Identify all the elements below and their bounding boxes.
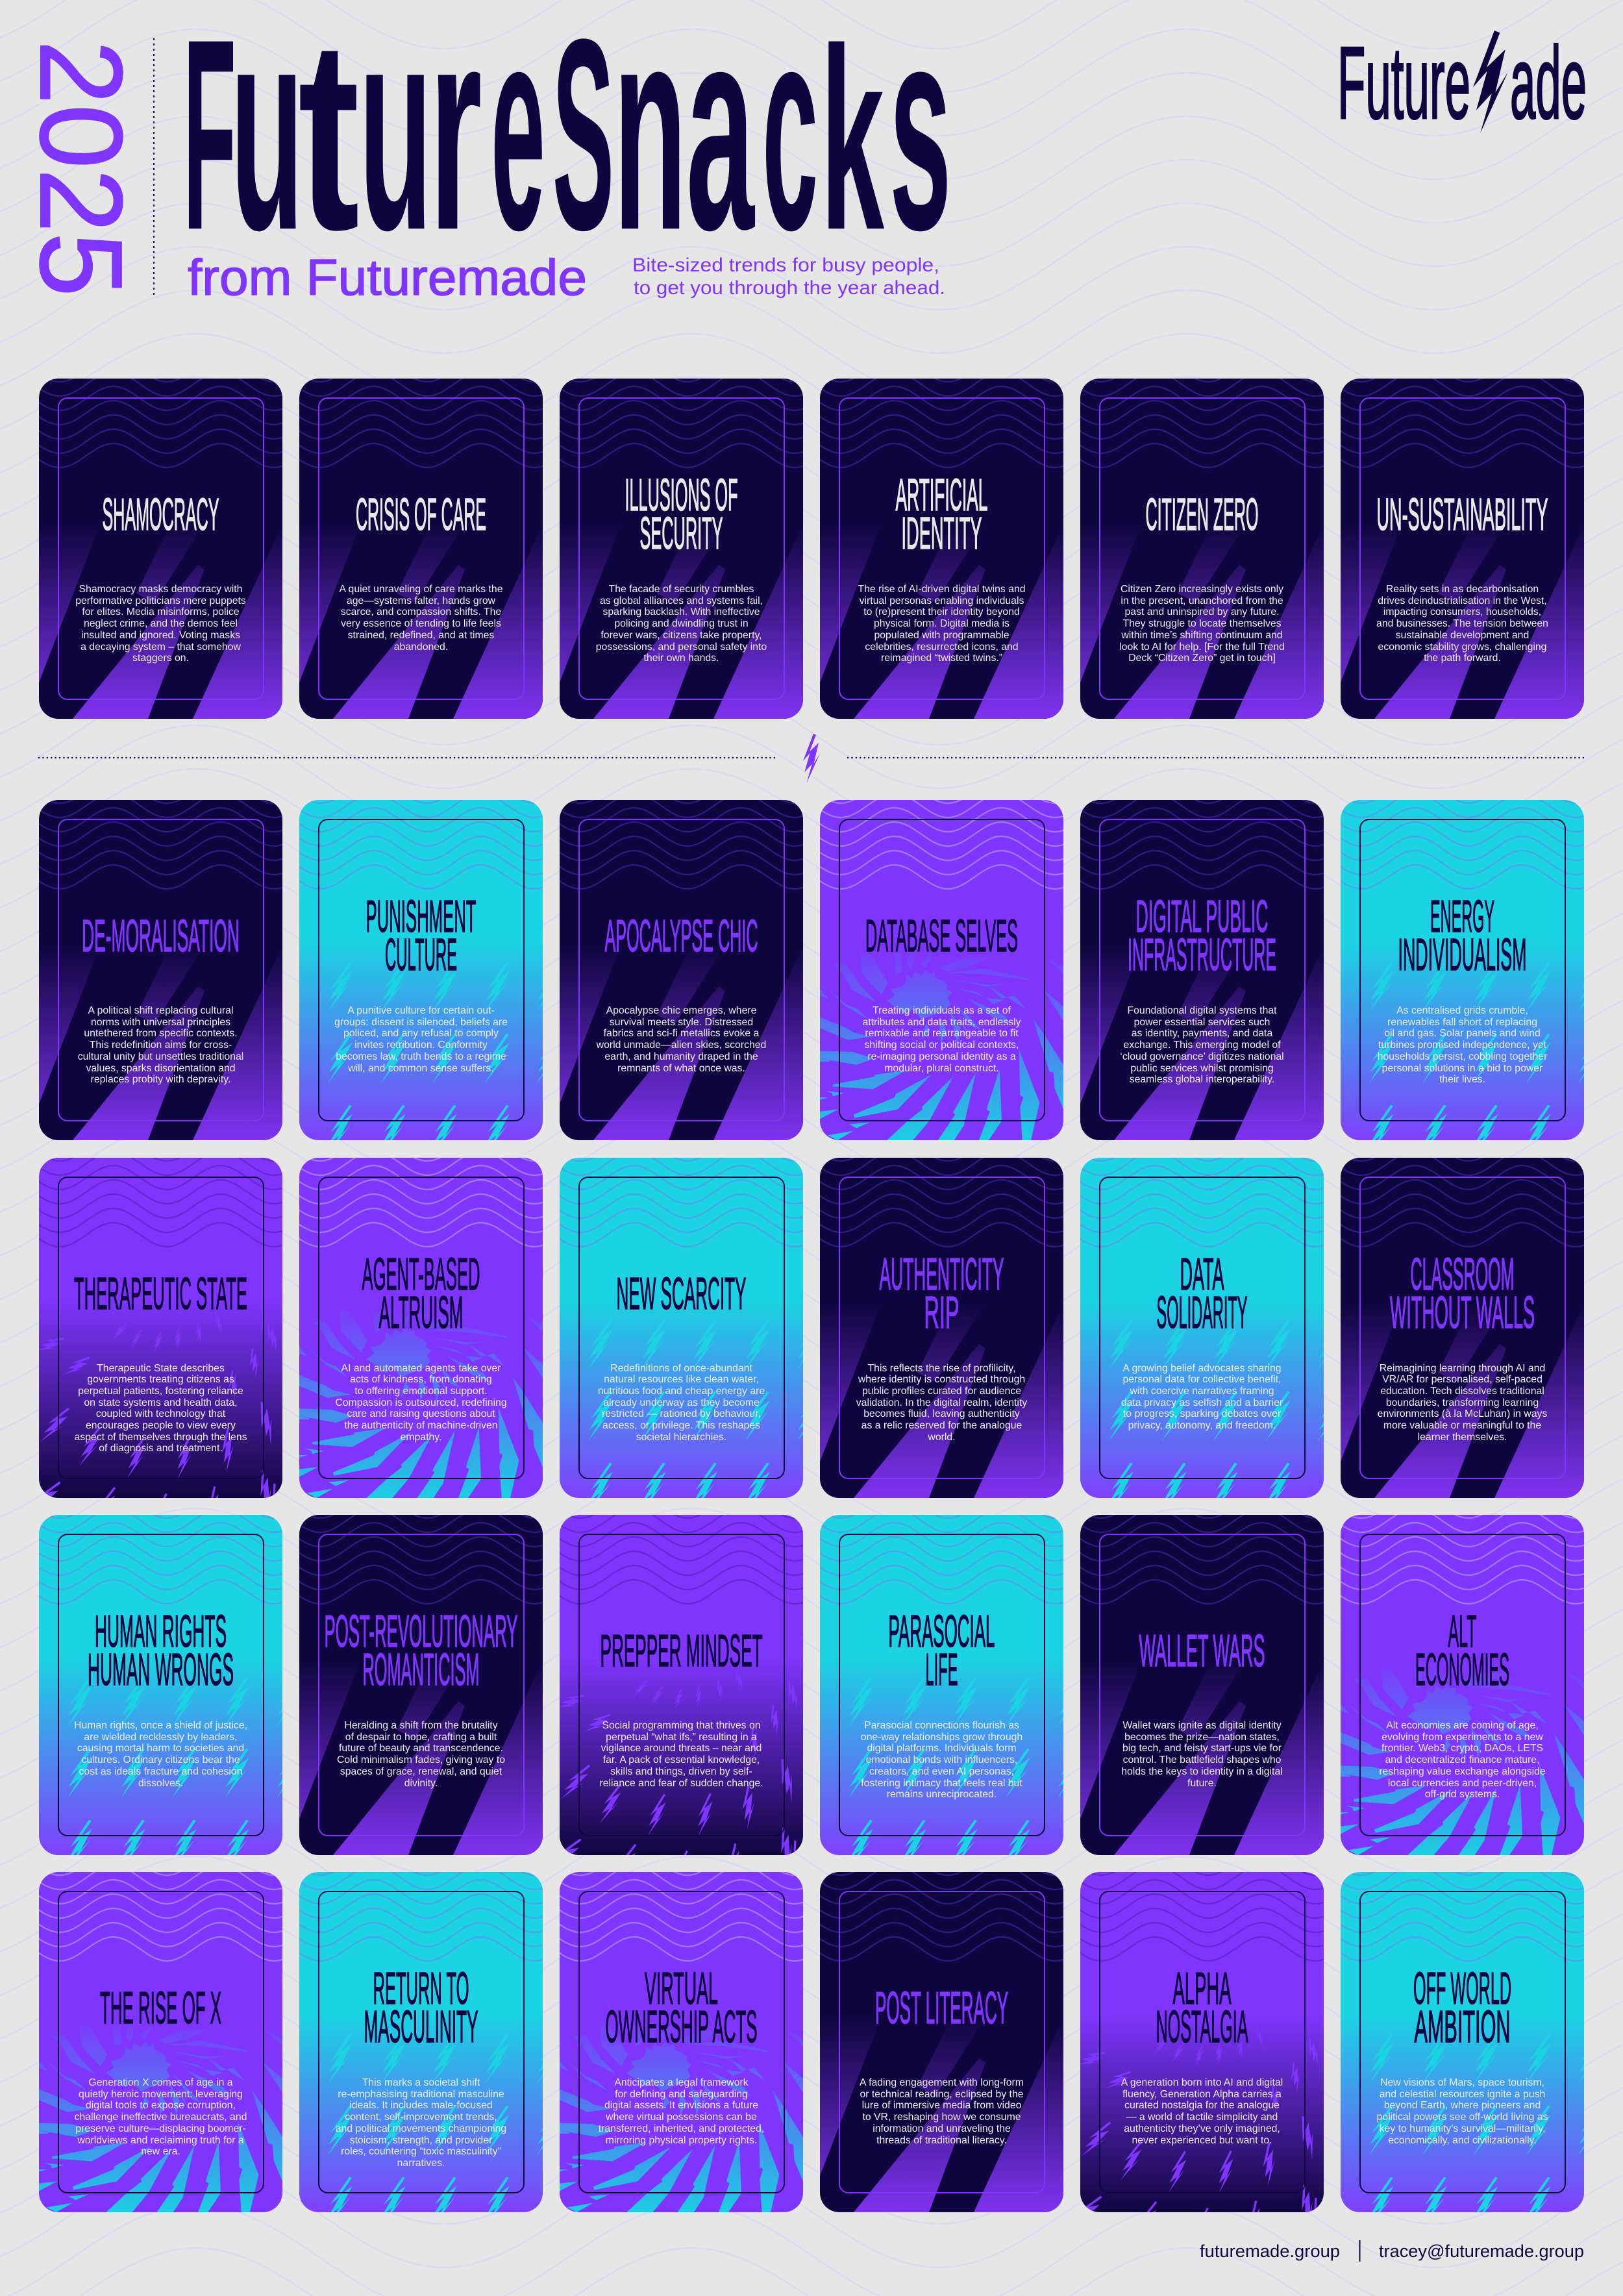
description: with coercive narratives framing: [1130, 1386, 1274, 1397]
description: spaces of grace, renewal, and quiet: [340, 1766, 502, 1777]
description: [560, 1362, 803, 1443]
card: Alt Economies: [1341, 1515, 1584, 1855]
description: physical form. Digital media is: [874, 618, 1010, 629]
description: in the present, unanchored from the: [1121, 595, 1283, 606]
description: [1376, 584, 1548, 664]
description: [560, 2077, 803, 2146]
description: where virtual possessions can be: [606, 2112, 757, 2123]
description: [1341, 1362, 1584, 1443]
card: Apocalypse Chic: [560, 800, 803, 1140]
description: future of beauty and transcendence.: [339, 1743, 503, 1754]
description: beyond Earth, where pioneers and: [1384, 2100, 1541, 2111]
description: roles, countering “toxic masculinity”: [341, 2146, 501, 2157]
description: shifting social or political contexts,: [865, 1040, 1019, 1051]
description: threads of traditional literacy.: [876, 2135, 1007, 2146]
description: Cold minimalism fades, giving way to: [337, 1754, 505, 1766]
card: Return to Masculinity: [299, 1872, 543, 2212]
description: Human rights, once a shield of justice,: [74, 1720, 247, 1731]
description: oil and gas. Solar panels and wind: [1384, 1028, 1541, 1039]
card: Classroom Without Walls: [1341, 1157, 1584, 1497]
description: new era.: [141, 2146, 180, 2157]
tagline: to get you through the year ahead.: [634, 277, 945, 299]
description: New visions of Mars, space tourism,: [1380, 2077, 1544, 2088]
description: A political shift replacing cultural: [88, 1005, 233, 1016]
title: [625, 469, 737, 558]
description: and celestial resources ignite a push: [1380, 2089, 1545, 2100]
description: exchange. This emerging model of: [1123, 1040, 1281, 1051]
description: cultural unity but unsettles traditional: [78, 1051, 243, 1062]
description: already underway as they become: [603, 1397, 760, 1408]
description: as a relic reserved for the analogue: [861, 1420, 1022, 1431]
footer contact: tracey@futuremade.group: [1379, 2241, 1584, 2261]
description: evolving from experiments to a new: [1381, 1732, 1543, 1743]
description: encourages people to view every: [86, 1420, 236, 1431]
title FutureSnacks: k: [821, 0, 884, 284]
card: Alpha Nostalgia: [1080, 1872, 1324, 2212]
description: survival meets style. Distressed: [610, 1017, 753, 1028]
description: very essence of tending to life feels: [341, 618, 501, 629]
description: reliance and fear of sudden change.: [599, 1778, 763, 1789]
description: [1080, 1362, 1324, 1432]
description: remnants of what once was.: [617, 1063, 745, 1074]
card: The Rise of X: [39, 1872, 282, 2212]
title: DATA: [1180, 1248, 1224, 1299]
description: information and unraveling the: [873, 2123, 1011, 2134]
description: A fading engagement with long-form: [860, 2077, 1024, 2088]
title: [1413, 1963, 1511, 2052]
card: Shamocracy: [39, 379, 282, 719]
description: aspect of themselves through the lens: [74, 1432, 247, 1443]
description: [339, 584, 502, 653]
description: restricted — rationed by behaviour,: [602, 1408, 761, 1419]
description: [75, 584, 246, 664]
description: Generation X comes of age in a: [88, 2077, 233, 2088]
description: and political movements championing: [336, 2123, 506, 2134]
title: [1390, 1248, 1535, 1338]
description: more valuable or meaningful to the: [1383, 1420, 1541, 1431]
card: Off World Ambition: [1341, 1872, 1584, 2212]
card: New Scarcity: [560, 1157, 803, 1497]
card: Illusions of Security: [560, 379, 803, 719]
description: This redefinition aims for cross-: [90, 1040, 232, 1051]
description: This marks a societal shift: [362, 2077, 480, 2088]
description: Foundational digital systems that: [1127, 1005, 1277, 1016]
description: [1341, 2077, 1584, 2146]
description: content, self-improvement trends,: [345, 2112, 497, 2123]
description: replaces probity with depravity.: [91, 1074, 230, 1085]
description: [299, 1720, 543, 1789]
description: boundaries, transforming learning: [1386, 1397, 1539, 1408]
footer contact: futuremade.group: [1200, 2241, 1340, 2261]
description: earth, and humanity draped in the: [604, 1051, 758, 1062]
description: Treating individuals as a set of: [873, 1005, 1011, 1016]
description: age—systems falter, hands grow: [347, 595, 495, 606]
description: [39, 1720, 282, 1789]
description: They struggle to locate themselves: [1122, 618, 1282, 629]
title: [366, 891, 477, 980]
description: norms with universal principles: [91, 1017, 230, 1028]
title: [88, 1606, 234, 1695]
description: care and raising questions about: [347, 1408, 495, 1419]
description: A generation born into AI and digital: [1121, 2077, 1283, 2088]
subtitle from Futuremade: from Futuremade: [188, 249, 587, 306]
description: Alt economies are coming of age,: [1386, 1720, 1539, 1731]
description: world unmade—alien skies, scorched: [597, 1040, 766, 1051]
description: A growing belief advocates sharing: [1122, 1362, 1282, 1374]
description: ideals. It includes male-focused: [349, 2100, 493, 2111]
description: far. A pack of essential knowledge,: [603, 1754, 760, 1766]
card: Data Solidarity: [1080, 1157, 1324, 1497]
card: Database Selves: [820, 800, 1063, 1140]
description: The rise of AI-driven digital twins and: [858, 584, 1026, 595]
description: curated nostalgia for the analogue: [1124, 2100, 1280, 2111]
description: [1378, 1005, 1548, 1085]
description: dissolves.: [138, 1778, 183, 1789]
description: data privacy as selfish and a barrier: [1121, 1397, 1283, 1408]
card: Human Rights Human Wrongs: [39, 1515, 282, 1855]
description: Citizen Zero increasingly exists only: [1121, 584, 1283, 595]
description: impacting consumers, households,: [1383, 606, 1541, 618]
description: turbines promised independence, yet: [1378, 1040, 1546, 1051]
card: Energy Individualism: [1341, 800, 1584, 1140]
description: to progress, sparking debates over: [1123, 1408, 1281, 1419]
description: societal hierarchies.: [636, 1432, 726, 1443]
description: validation. In the digital realm, identity: [856, 1397, 1027, 1408]
description: values, sparks disorientation and: [86, 1063, 236, 1074]
description: their own hands.: [644, 653, 719, 664]
title: ALPHA: [1172, 1963, 1232, 2014]
description: [596, 584, 767, 664]
title: [605, 1963, 757, 2052]
description: ‘cloud governance’ digitizes national: [1120, 1051, 1284, 1062]
title: [1398, 891, 1527, 980]
title: [1156, 1963, 1248, 2052]
description: stoicism, strength, and provider: [350, 2135, 492, 2146]
description: staggers on.: [132, 653, 189, 664]
card: Parasocial Life: [820, 1515, 1063, 1855]
description: narratives.: [397, 2158, 445, 2169]
description: [299, 1362, 543, 1443]
description: Parasocial connections flourish as: [864, 1720, 1019, 1731]
description: re-emphasising traditional masculine: [338, 2089, 504, 2100]
title: [1128, 891, 1276, 980]
description: acts of kindness, from donating: [350, 1374, 492, 1385]
description: forever wars, citizens take property,: [601, 630, 762, 641]
description: VR/AR for personalised, self-paced: [1382, 1374, 1542, 1385]
footer contact: [0, 2234, 1623, 2273]
description: personal data for collective benefit,: [1122, 1374, 1282, 1385]
card: Artificial Identity: [820, 379, 1063, 719]
description: — a world of tactile simplicity and: [1126, 2112, 1278, 2123]
description: causing mortal harm to societies and: [77, 1743, 244, 1754]
description: challenge ineffective bureaucrats, and: [75, 2112, 247, 2123]
description: renewables fall short of replacing: [1387, 1017, 1537, 1028]
title: ALT: [1448, 1606, 1476, 1656]
description: divinity.: [404, 1778, 438, 1789]
title: RIP: [924, 1287, 960, 1338]
description: worldviews and reclaiming truth for a: [77, 2135, 244, 2146]
description: one-way relationships grow through: [861, 1732, 1022, 1743]
card: Citizen Zero: [1080, 379, 1324, 719]
description: Wallet wars ignite as digital identity: [1122, 1720, 1282, 1731]
description: [1119, 584, 1285, 664]
description: and businesses. The tension between: [1376, 618, 1548, 629]
description: celebrities, resurrected icons, and: [865, 642, 1019, 653]
description: control. The battlefield shapes who: [1123, 1754, 1281, 1766]
description: Shamocracy masks democracy with: [79, 584, 242, 595]
description: [1341, 1720, 1584, 1801]
description: Social programming that thrives on: [602, 1720, 761, 1731]
title: [1157, 1248, 1248, 1338]
title: [364, 1963, 478, 2052]
description: frontier. Web3, crypto, DAOs, LETS: [1381, 1743, 1543, 1754]
description: digital assets. It envisions a future: [604, 2100, 758, 2111]
description: [78, 1005, 243, 1085]
description: fluency, Generation Alpha carries a: [1122, 2089, 1282, 2100]
description: local currencies and peer-driven,: [1388, 1778, 1537, 1789]
description: or technical reading, eclipsed by the: [860, 2089, 1024, 2100]
description: remixable and rearrangeable to fit: [865, 1028, 1019, 1039]
description: possessions, and personal safety into: [596, 642, 767, 653]
description: power essential services such: [1134, 1017, 1270, 1028]
description: past and uninspired by any future.: [1124, 606, 1279, 618]
description: lure of immersive media from video: [862, 2100, 1021, 2111]
description: becomes the prize—nation states,: [1124, 1732, 1280, 1743]
description: [820, 1362, 1063, 1443]
description: [334, 1005, 508, 1074]
description: their lives.: [1439, 1074, 1485, 1085]
description: key to humanity’s survival—militarily,: [1380, 2123, 1545, 2134]
description: emotional bonds with influencers,: [866, 1754, 1017, 1766]
description: [1080, 1720, 1324, 1789]
description: vigilance around threats – near and: [601, 1743, 762, 1754]
description: As centralised grids crumble,: [1396, 1005, 1528, 1016]
description: empathy.: [401, 1432, 441, 1443]
description: [1080, 2077, 1324, 2146]
description: Reimagining learning through AI and: [1380, 1362, 1545, 1374]
description: [299, 2077, 543, 2169]
card: Punishment Culture: [299, 800, 543, 1140]
description: AI and automated agents take over: [341, 1362, 501, 1374]
description: mirroring physical property rights.: [606, 2135, 757, 2146]
card: Therapeutic State: [39, 1158, 282, 1498]
year 2025 vertical: 2025: [16, 40, 146, 297]
description: Therapeutic State describes: [97, 1362, 225, 1374]
description: public profiles curated for audience: [862, 1386, 1021, 1397]
description: sustainable development and: [1396, 630, 1529, 641]
description: remains unreciprocated.: [887, 1789, 997, 1800]
description: big tech, and feisty start-ups vie for: [1122, 1743, 1282, 1754]
description: the path forward.: [1424, 653, 1501, 664]
description: perpetual patients, fostering reliance: [78, 1386, 243, 1397]
description: as identity, payments, and data: [1132, 1028, 1272, 1039]
description: the authenticity of machine-driven: [344, 1420, 498, 1431]
description: of despair to hope, crafting a built: [345, 1732, 497, 1743]
description: Heralding a shift from the brutality: [344, 1720, 498, 1731]
description: Apocalypse chic emerges, where: [606, 1005, 756, 1016]
title: [325, 1606, 518, 1695]
description: fostering intimacy that feels real but: [861, 1778, 1022, 1789]
description: natural resources like clean water,: [604, 1374, 759, 1385]
description: for defining and safeguarding: [615, 2089, 748, 2100]
card: Crisis of Care: [299, 379, 543, 719]
description: scarce, and compassion shifts. The: [341, 606, 501, 618]
description: becomes law, truth bends to a regime: [336, 1051, 506, 1062]
description: cost as ideals fracture and cohesion: [79, 1766, 243, 1777]
description: off-grid systems.: [1425, 1789, 1500, 1800]
description: future.: [1187, 1778, 1217, 1789]
description: [862, 1005, 1021, 1074]
description: [1120, 1005, 1284, 1085]
title: [879, 1248, 1004, 1338]
description: political powers see off-world living as: [1376, 2112, 1548, 2123]
description: and decentralized finance mature,: [1385, 1754, 1539, 1766]
description: where identity is constructed through: [858, 1374, 1025, 1385]
card: Prepper Mindset: [560, 1515, 803, 1855]
description: perpetual “what ifs,” resulting in a: [606, 1732, 757, 1743]
description: personal solutions in a bid to power: [1382, 1063, 1542, 1074]
description: reshaping value exchange alongside: [1379, 1766, 1546, 1777]
card: Post Literacy: [820, 1872, 1063, 2212]
description: [596, 1005, 766, 1074]
title: [1415, 1606, 1509, 1695]
description: [820, 2077, 1063, 2146]
description: [820, 1720, 1063, 1801]
description: untethered from specific contexts.: [84, 1028, 238, 1039]
description: [858, 584, 1026, 664]
description: A punitive culture for certain out-: [347, 1005, 495, 1016]
title FutureSnacks: [183, 0, 952, 290]
description: neglect crime, and the demos feel: [84, 618, 238, 629]
description: digital tools to expose corruption,: [86, 2100, 236, 2111]
description: Redefinitions of once-abundant: [610, 1362, 752, 1374]
description: becomes fluid, leaving authenticity: [863, 1408, 1020, 1419]
description: groups: dissent is silenced, beliefs are: [334, 1017, 508, 1028]
description: virtual personas enabling individuals: [860, 595, 1024, 606]
description: never experienced but want to.: [1132, 2135, 1272, 2146]
description: cultures. Ordinary citizens bear the: [81, 1754, 240, 1766]
description: look to AI for help. [For the full Trend: [1119, 642, 1285, 653]
title: [888, 1606, 995, 1695]
description: Compassion is outsourced, redefining: [335, 1397, 507, 1408]
description: for elites. Media misinforms, police: [82, 606, 240, 618]
description: of diagnosis and treatment.: [99, 1443, 223, 1454]
description: a decaying system – that somehow: [81, 642, 241, 653]
description: will, and common sense suffers.: [348, 1063, 494, 1074]
description: to VR, reshaping how we consume: [862, 2112, 1021, 2123]
card: Un-Sustainability: [1341, 379, 1584, 719]
description: A quiet unraveling of care marks the: [339, 584, 502, 595]
description: within time’s shifting continuum and: [1121, 630, 1283, 641]
description: learner themselves.: [1418, 1432, 1507, 1443]
tagline: Bite-sized trends for busy people,: [632, 255, 939, 276]
description: to (re)present their identity beyond: [863, 606, 1020, 618]
description: populated with programmable: [874, 630, 1010, 641]
description: governments treating citizens as: [87, 1374, 234, 1385]
description: environments (à la McLuhan) in ways: [1378, 1408, 1547, 1419]
description: to offering emotional support.: [354, 1386, 488, 1397]
title: [896, 469, 988, 558]
description: public services whilst promising: [1130, 1063, 1274, 1074]
description: skills and things, driven by self-: [610, 1766, 752, 1777]
title: [362, 1248, 480, 1338]
card: Wallet Wars: [1080, 1515, 1324, 1855]
description: world.: [928, 1432, 956, 1443]
card: Authenticity RIP: [820, 1157, 1063, 1497]
description: modular, plural construct.: [884, 1063, 999, 1074]
description: transferred, inherited, and protected,: [599, 2123, 764, 2134]
description: re-imaging personal identity as a: [867, 1051, 1016, 1062]
description: sparking backlash. With ineffective: [602, 606, 760, 618]
description: insulted and ignored. Voting masks: [81, 630, 240, 641]
description: digital platforms. Individuals form: [867, 1743, 1017, 1754]
description: policing and dwindling trust in: [614, 618, 749, 629]
description: access, or privilege. This reshapes: [602, 1420, 760, 1431]
card: De-Moralisation: [39, 800, 282, 1140]
description: Deck “Citizen Zero” get in touch]: [1128, 653, 1276, 664]
description: households persist, cobbling together: [1378, 1051, 1547, 1062]
description: [39, 2077, 282, 2158]
title: LIFE: [926, 1644, 958, 1695]
description: on state systems and health data,: [84, 1397, 238, 1408]
description: [560, 1720, 803, 1789]
card: Post-Revolutionary Romanticism: [299, 1515, 543, 1855]
description: holds the keys to identity in a digital: [1121, 1766, 1283, 1777]
description: [39, 1362, 282, 1454]
description: Reality sets in as decarbonisation: [1386, 584, 1539, 595]
description: as global alliances and systems fail,: [600, 595, 763, 606]
description: economic stability grows, challenging: [1378, 642, 1546, 653]
card: Agent-Based Altruism: [299, 1157, 543, 1497]
description: fabrics and sci-fi metallics evoke a: [604, 1028, 759, 1039]
divider with bolt: [38, 734, 1584, 783]
description: coupled with technology that: [96, 1408, 225, 1419]
description: strained, redefined, and at times: [348, 630, 494, 641]
tagline: [632, 255, 945, 299]
description: policed, and any refusal to comply: [343, 1028, 499, 1039]
description: reimagined “twisted twins.”: [881, 653, 1002, 664]
description: attributes and data traits, endlessly: [862, 1017, 1021, 1028]
description: authenticity they’ve only imagined,: [1124, 2123, 1280, 2134]
description: privacy, autonomy, and freedom.: [1128, 1420, 1276, 1431]
description: education. Tech dissolves traditional: [1380, 1386, 1544, 1397]
description: performative politicians mere puppets: [75, 595, 246, 606]
description: Anticipates a legal framework: [614, 2077, 749, 2088]
card: Virtual Ownership Acts: [560, 1872, 803, 2212]
description: preserve culture—displacing boomer-: [75, 2123, 246, 2134]
description: nutritious food and cheap energy are: [598, 1386, 765, 1397]
description: drives deindustrialisation in the West,: [1378, 595, 1547, 606]
description: quietly heroic movement: leveraging: [79, 2089, 243, 2100]
description: This reflects the rise of profilicity,: [868, 1362, 1015, 1374]
description: abandoned.: [394, 642, 448, 653]
description: invites retribution. Conformity: [354, 1040, 488, 1051]
description: are wielded recklessly by leaders,: [84, 1732, 238, 1743]
header: [16, 26, 1587, 306]
description: seamless global interoperability.: [1130, 1074, 1274, 1085]
description: creators, and even AI personas,: [869, 1766, 1014, 1777]
card: Digital Public Infrastructure: [1080, 800, 1324, 1140]
description: economically, and civilizationally.: [1388, 2135, 1537, 2146]
description: The facade of security crumbles: [609, 584, 754, 595]
